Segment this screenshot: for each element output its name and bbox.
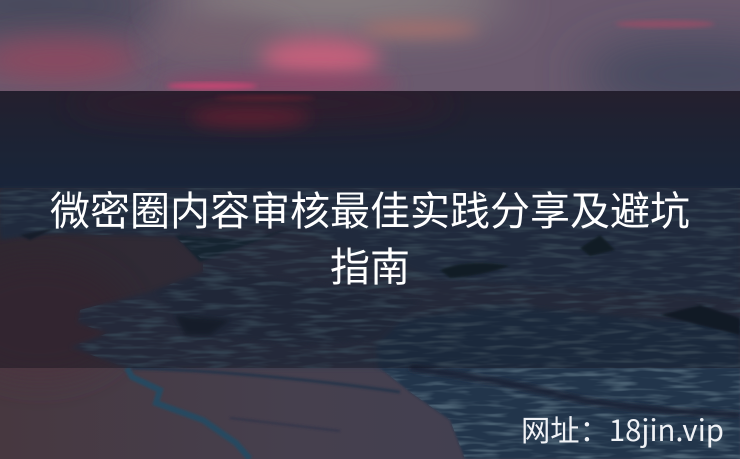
water ripple texture bbox=[0, 188, 740, 459]
sky bbox=[0, 0, 740, 91]
water and foam bbox=[0, 188, 740, 459]
website address: 网址：18jin.vip bbox=[521, 408, 724, 450]
dark overlay band bbox=[0, 91, 740, 368]
wet shoreline details bbox=[127, 368, 250, 459]
title: 微密圈内容审核最佳实践分享及避坑指南 bbox=[50, 179, 690, 293]
sea bbox=[0, 88, 740, 191]
sand bbox=[0, 188, 740, 459]
